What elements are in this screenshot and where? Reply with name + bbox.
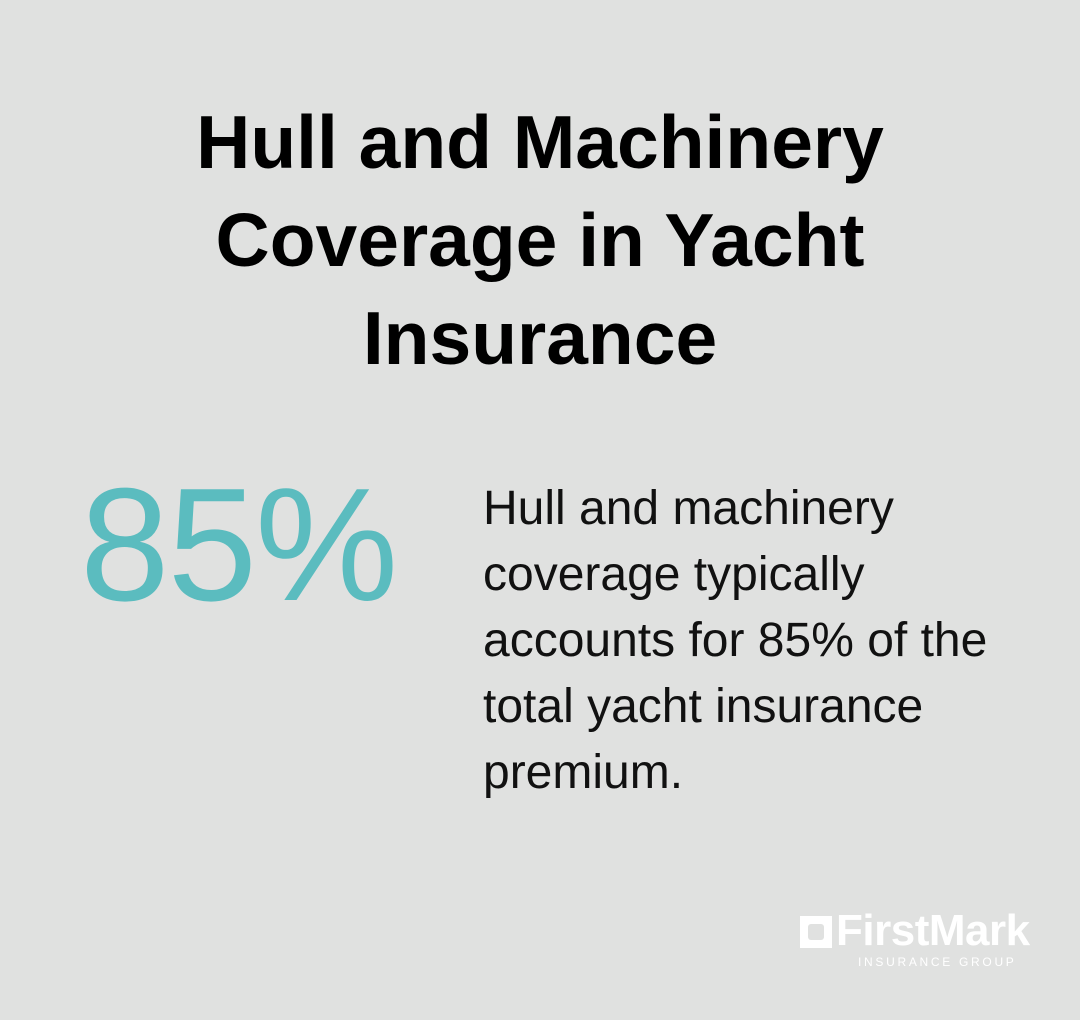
big statistic: 85% <box>80 455 396 635</box>
title: Coverage in Yacht <box>216 198 864 282</box>
logo: FirstMark <box>800 906 1030 969</box>
description text: accounts for 85% of the <box>483 614 987 667</box>
description text: premium. <box>483 746 683 799</box>
icon: logo square <box>800 916 832 948</box>
logo: FirstMark: FirstMark <box>836 906 1030 955</box>
description text: total yacht insurance <box>483 680 923 733</box>
title: Hull and Machinery <box>196 100 884 184</box>
description text <box>483 482 987 799</box>
description text: coverage typically <box>483 548 865 601</box>
logo: FirstMark: INSURANCE GROUP <box>858 955 1017 969</box>
title: Insurance <box>363 296 717 380</box>
title <box>196 100 884 380</box>
description text: Hull and machinery <box>483 482 894 535</box>
